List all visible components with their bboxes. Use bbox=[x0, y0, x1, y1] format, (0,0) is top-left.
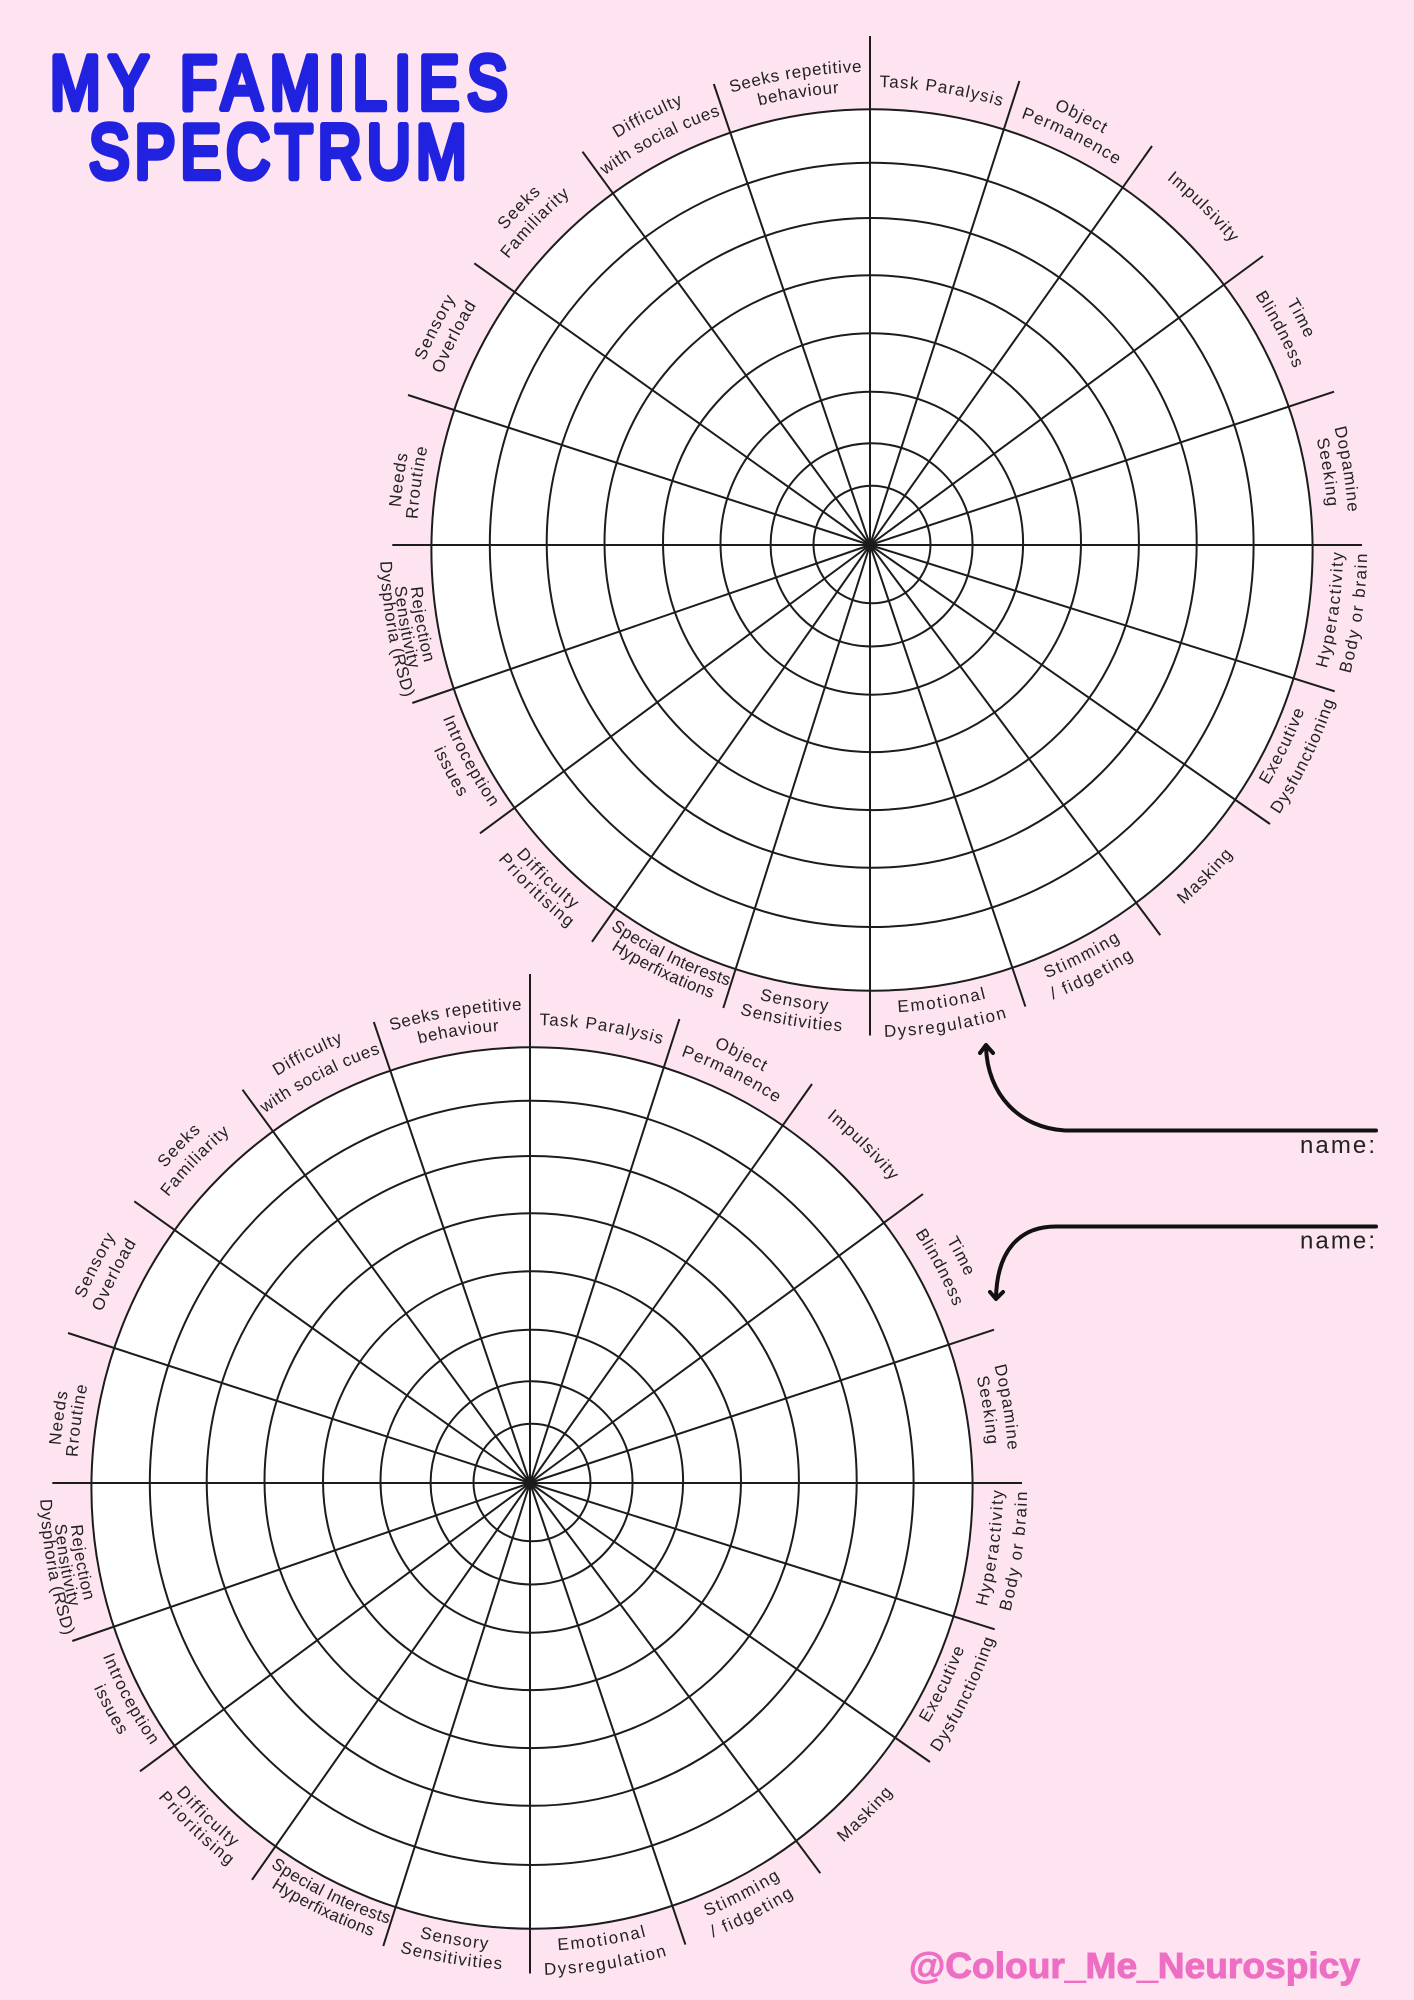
label: Difficulty Prioritising: Prioritising bbox=[499, 852, 574, 928]
label: Time Blindness: Blindness bbox=[912, 1225, 968, 1309]
name label 1: name: bbox=[1300, 1132, 1375, 1159]
label: Introception issues: issues bbox=[90, 1681, 133, 1738]
label: Executive Dysfunctioning: Dysfunctioning bbox=[927, 1633, 999, 1755]
label: Dopamine Seeking: Dopamine bbox=[1334, 426, 1358, 511]
label: Sensory Overload: Sensory bbox=[71, 1228, 120, 1301]
label: Object Permanence: Permanence bbox=[1022, 107, 1120, 164]
label: Sensory Sensitivities: Sensory bbox=[760, 989, 828, 1014]
wheel: top bbox=[377, 36, 1368, 1040]
label: Difficulty with social cues: Difficulty bbox=[269, 1028, 346, 1080]
label: Difficulty with social cues: with social cues bbox=[600, 108, 720, 174]
watermark: @Colour_Me_Neurospicy bbox=[909, 1945, 1360, 1986]
label: Dopamine Seeking: Seeking bbox=[1317, 438, 1338, 506]
label: Difficulty with social cues: Difficulty bbox=[612, 96, 680, 138]
label: Emotional Dysregulation: Dysregulation bbox=[544, 1941, 670, 1979]
label: Sensory Overload: Overload bbox=[432, 300, 476, 372]
label: Seeks repetitive behaviour: behaviour bbox=[757, 84, 838, 106]
label: Dopamine Seeking bbox=[977, 1364, 1018, 1449]
title: SPECTRUM bbox=[89, 110, 467, 195]
label: Hyperactivity Body or brain: Body or brain bbox=[1339, 554, 1368, 672]
label: Hyperactivity Body or brain bbox=[976, 1490, 1028, 1610]
label: Special Interests Hyperfixations: Special Interests bbox=[268, 1854, 393, 1928]
label: Sensory Sensitivities: Sensory bbox=[418, 1923, 490, 1953]
label: Emotional Dysregulation bbox=[545, 1924, 666, 1978]
label: Special Interests Hyperfixations: Special Interests bbox=[612, 920, 730, 985]
label: Sensory Sensitivities: Sensitivities bbox=[741, 1004, 842, 1032]
label: Sensory Overload: Overload bbox=[88, 1234, 140, 1314]
label: Special Interests Hyperfixations: Hyperfixations bbox=[269, 1874, 377, 1940]
name label 2: name: bbox=[1300, 1228, 1375, 1254]
title bbox=[50, 41, 508, 195]
label: Executive Dysfunctioning: Executive bbox=[915, 1642, 969, 1725]
label: Stimming / fidgeting: Stimming bbox=[701, 1865, 784, 1920]
label: Needs Rroutine bbox=[389, 447, 427, 518]
label: Introception issues: Introception bbox=[99, 1650, 164, 1748]
label: Executive Dysfunctioning: Executive bbox=[1258, 709, 1304, 784]
spokes bbox=[52, 974, 1022, 1974]
label: Rejection Sensitivity Dysphoria (RSD): Sensitivity bbox=[395, 586, 418, 667]
label: Seeks Familiarity: Seeks bbox=[498, 188, 540, 228]
label: Task Paralysis: Task Paralysis bbox=[880, 76, 1002, 106]
label: Sensory Overload bbox=[415, 294, 476, 372]
title: MY FAMILIES bbox=[50, 41, 508, 126]
label: Sensory Overload: Sensory bbox=[415, 294, 456, 360]
label: Impulsivity: Impulsivity bbox=[1168, 171, 1238, 241]
label: Seeks repetitive behaviour: behaviour bbox=[416, 1016, 500, 1048]
label: Executive Dysfunctioning: Dysfunctioning bbox=[1270, 699, 1336, 814]
label: Emotional Dysregulation: Emotional bbox=[557, 1921, 649, 1954]
label: Difficulty with social cues: with social cues bbox=[256, 1039, 382, 1117]
label: Needs Rroutine: Needs bbox=[389, 454, 408, 506]
label: Impulsivity: Impulsivity bbox=[824, 1106, 904, 1184]
label: Hyperactivity Body or brain: Hyperactivity bbox=[972, 1488, 1007, 1608]
label: Sensory Sensitivities bbox=[741, 989, 842, 1032]
label: Difficulty Prioritising: Prioritising bbox=[155, 1788, 239, 1870]
label: Time Blindness: Blindness bbox=[1256, 290, 1301, 368]
label: Time Blindness: Time bbox=[943, 1233, 980, 1279]
label: Seeks Familiarity: Familiarity bbox=[157, 1121, 233, 1200]
label: Object Permanence: Object bbox=[716, 1038, 768, 1072]
label: Stimming / fidgeting: Stimming bbox=[1044, 934, 1120, 977]
label: Needs Rroutine: Needs bbox=[46, 1388, 72, 1446]
label: Time Blindness: Time bbox=[1288, 297, 1312, 337]
label: Difficulty Prioritising: Difficulty bbox=[173, 1782, 244, 1851]
label: Difficulty Prioritising: Difficulty bbox=[517, 848, 579, 908]
label: Stimming / fidgeting: / fidgeting bbox=[1052, 951, 1134, 1000]
label: Introception issues: Introception bbox=[443, 715, 497, 806]
label: Needs Rroutine bbox=[49, 1385, 87, 1456]
label: Rejection Sensitivity Dysphoria (RSD): Sensitivity bbox=[51, 1523, 84, 1609]
label: Needs Rroutine: Rroutine bbox=[406, 447, 427, 518]
label: Hyperactivity Body or brain: Hyperactivity bbox=[1316, 552, 1346, 668]
ring grid bbox=[91, 1047, 973, 1929]
label: Emotional Dysregulation: Emotional bbox=[898, 986, 985, 1012]
label: Rejection Sensitivity Dysphoria (RSD): Dysphoria (RSD) bbox=[377, 562, 415, 696]
label: Dopamine Seeking: Dopamine bbox=[991, 1362, 1023, 1452]
wheel: bottom bbox=[37, 974, 1028, 1978]
label: Dopamine Seeking: Seeking bbox=[973, 1374, 1002, 1446]
label: Emotional Dysregulation bbox=[885, 986, 1006, 1040]
label: Hyperactivity Body or brain bbox=[1316, 552, 1368, 672]
label: Sensory Overload bbox=[75, 1232, 136, 1310]
label: Sensory Sensitivities: Sensitivities bbox=[399, 1938, 504, 1973]
label: Object Permanence: Permanence bbox=[680, 1042, 786, 1107]
label: Task Paralysis: Task Paralysis bbox=[540, 1014, 662, 1044]
ring grid bbox=[431, 109, 1313, 991]
label: Object Permanence: Object bbox=[1056, 100, 1108, 134]
label: Rejection Sensitivity Dysphoria (RSD): Rejection bbox=[67, 1524, 99, 1603]
spokes bbox=[392, 36, 1362, 1036]
label: Seeks repetitive behaviour: Seeks repetitive bbox=[387, 995, 523, 1035]
label: Stimming / fidgeting: / fidgeting bbox=[707, 1882, 797, 1941]
label: Dopamine Seeking bbox=[1317, 426, 1358, 511]
label: Seeks Familiarity: Seeks bbox=[154, 1119, 204, 1171]
label: Masking: Masking bbox=[833, 1782, 897, 1846]
label: Emotional Dysregulation: Dysregulation bbox=[885, 1010, 1006, 1040]
label: Rejection Sensitivity Dysphoria (RSD): Rejection bbox=[410, 587, 432, 662]
arrow: name line to top wheel bbox=[980, 1045, 1376, 1130]
arrow: name line to bottom wheel bbox=[990, 1226, 1376, 1299]
label: Sensory Sensitivities bbox=[401, 1927, 502, 1970]
label: Special Interests Hyperfixations: Hyperfixations bbox=[612, 940, 714, 998]
label: Introception issues: issues bbox=[434, 746, 466, 796]
label: Hyperactivity Body or brain: Body or brain bbox=[996, 1490, 1031, 1613]
label: Seeks repetitive behaviour: Seeks repetitive bbox=[730, 60, 861, 92]
label: Needs Rroutine: Rroutine bbox=[63, 1381, 92, 1458]
label: Rejection Sensitivity Dysphoria (RSD): Dysphoria (RSD) bbox=[36, 1499, 79, 1638]
label: Seeks Familiarity: Familiarity bbox=[500, 188, 568, 258]
label: Masking: Masking bbox=[1176, 850, 1234, 904]
